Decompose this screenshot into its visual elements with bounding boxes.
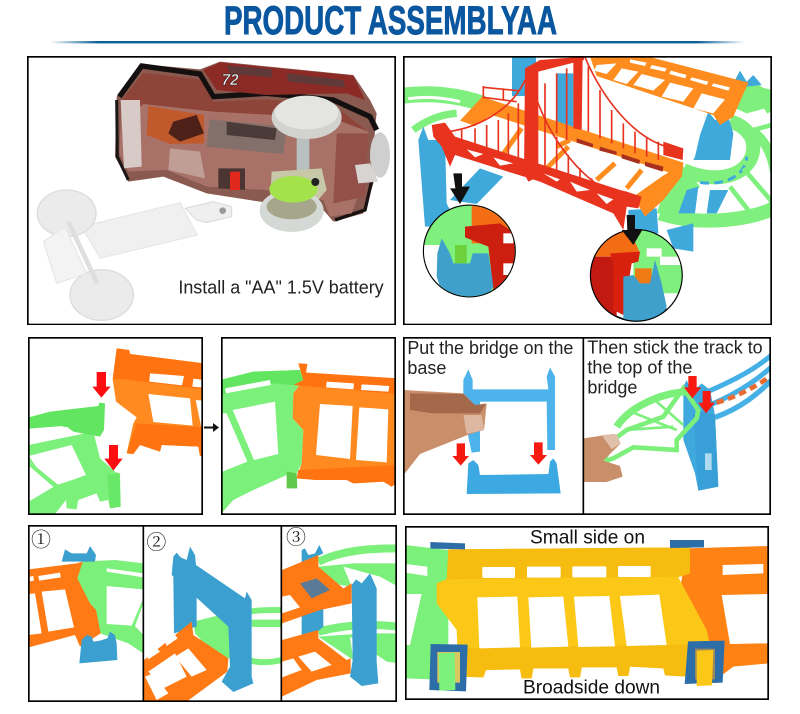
blue pillars — [418, 56, 762, 252]
step 1: ① — [31, 524, 51, 553]
callout: left detail circle — [422, 204, 516, 298]
step: stick track on bridge — [583, 337, 772, 491]
title: PRODUCT ASSEMBLYAA — [224, 0, 557, 43]
panel: track pieces joined — [220, 337, 397, 515]
icon: hand holding bridge — [403, 390, 487, 475]
green track piece — [29, 403, 121, 514]
joined green track — [220, 370, 303, 515]
green track sections — [400, 87, 777, 221]
icon: arrow to left base — [450, 173, 470, 204]
step 2 — [144, 526, 282, 702]
text: step instruction: the top of the — [587, 357, 692, 377]
callout: right detail circle — [590, 227, 690, 323]
panel: numbered assembly steps — [28, 521, 398, 702]
step 3: ③ — [286, 521, 306, 550]
step 1 — [29, 524, 143, 663]
text: battery note: Install a "AA" 1.5V battery — [178, 278, 384, 298]
text: step instruction: Put the bridge on the — [407, 338, 573, 358]
icon: arrow to right base — [622, 215, 643, 245]
green track end — [405, 545, 448, 680]
blue clips — [429, 540, 725, 691]
icon: toy car chassis — [115, 62, 390, 232]
icon: toy car chassis: 72 — [222, 72, 239, 89]
orange track sections — [460, 57, 748, 217]
orange track end — [680, 546, 769, 677]
icon: red arrows — [684, 376, 715, 413]
red suspension bridge — [432, 57, 683, 230]
panel: small side on, broadside down — [405, 526, 769, 700]
text: step instruction: base — [407, 358, 446, 378]
icon: red arrows — [92, 372, 123, 471]
icon: arrow between step panels — [204, 423, 219, 432]
panel: car battery install — [27, 56, 396, 325]
step 2: ② — [146, 526, 166, 555]
yellow center track — [437, 547, 712, 678]
icon: red arrows — [452, 442, 547, 466]
text: step instruction: bridge — [587, 377, 637, 397]
panel: bridge on base steps — [403, 337, 772, 515]
icon: hand holding track — [583, 434, 623, 482]
panel: track pieces before joining — [28, 337, 204, 515]
text: small side label: Small side on — [530, 527, 645, 548]
green and yellow pegs — [437, 649, 715, 691]
text: broadside label: Broadside down — [523, 677, 660, 698]
icon: clear battery cover — [37, 190, 232, 320]
panel: bridge overview — [400, 56, 777, 325]
orange track piece — [113, 348, 204, 456]
text: step instruction: Then stick the track to — [587, 337, 763, 357]
step 3 — [282, 521, 398, 697]
joined orange track — [293, 363, 397, 487]
step: put bridge on base — [403, 338, 573, 494]
